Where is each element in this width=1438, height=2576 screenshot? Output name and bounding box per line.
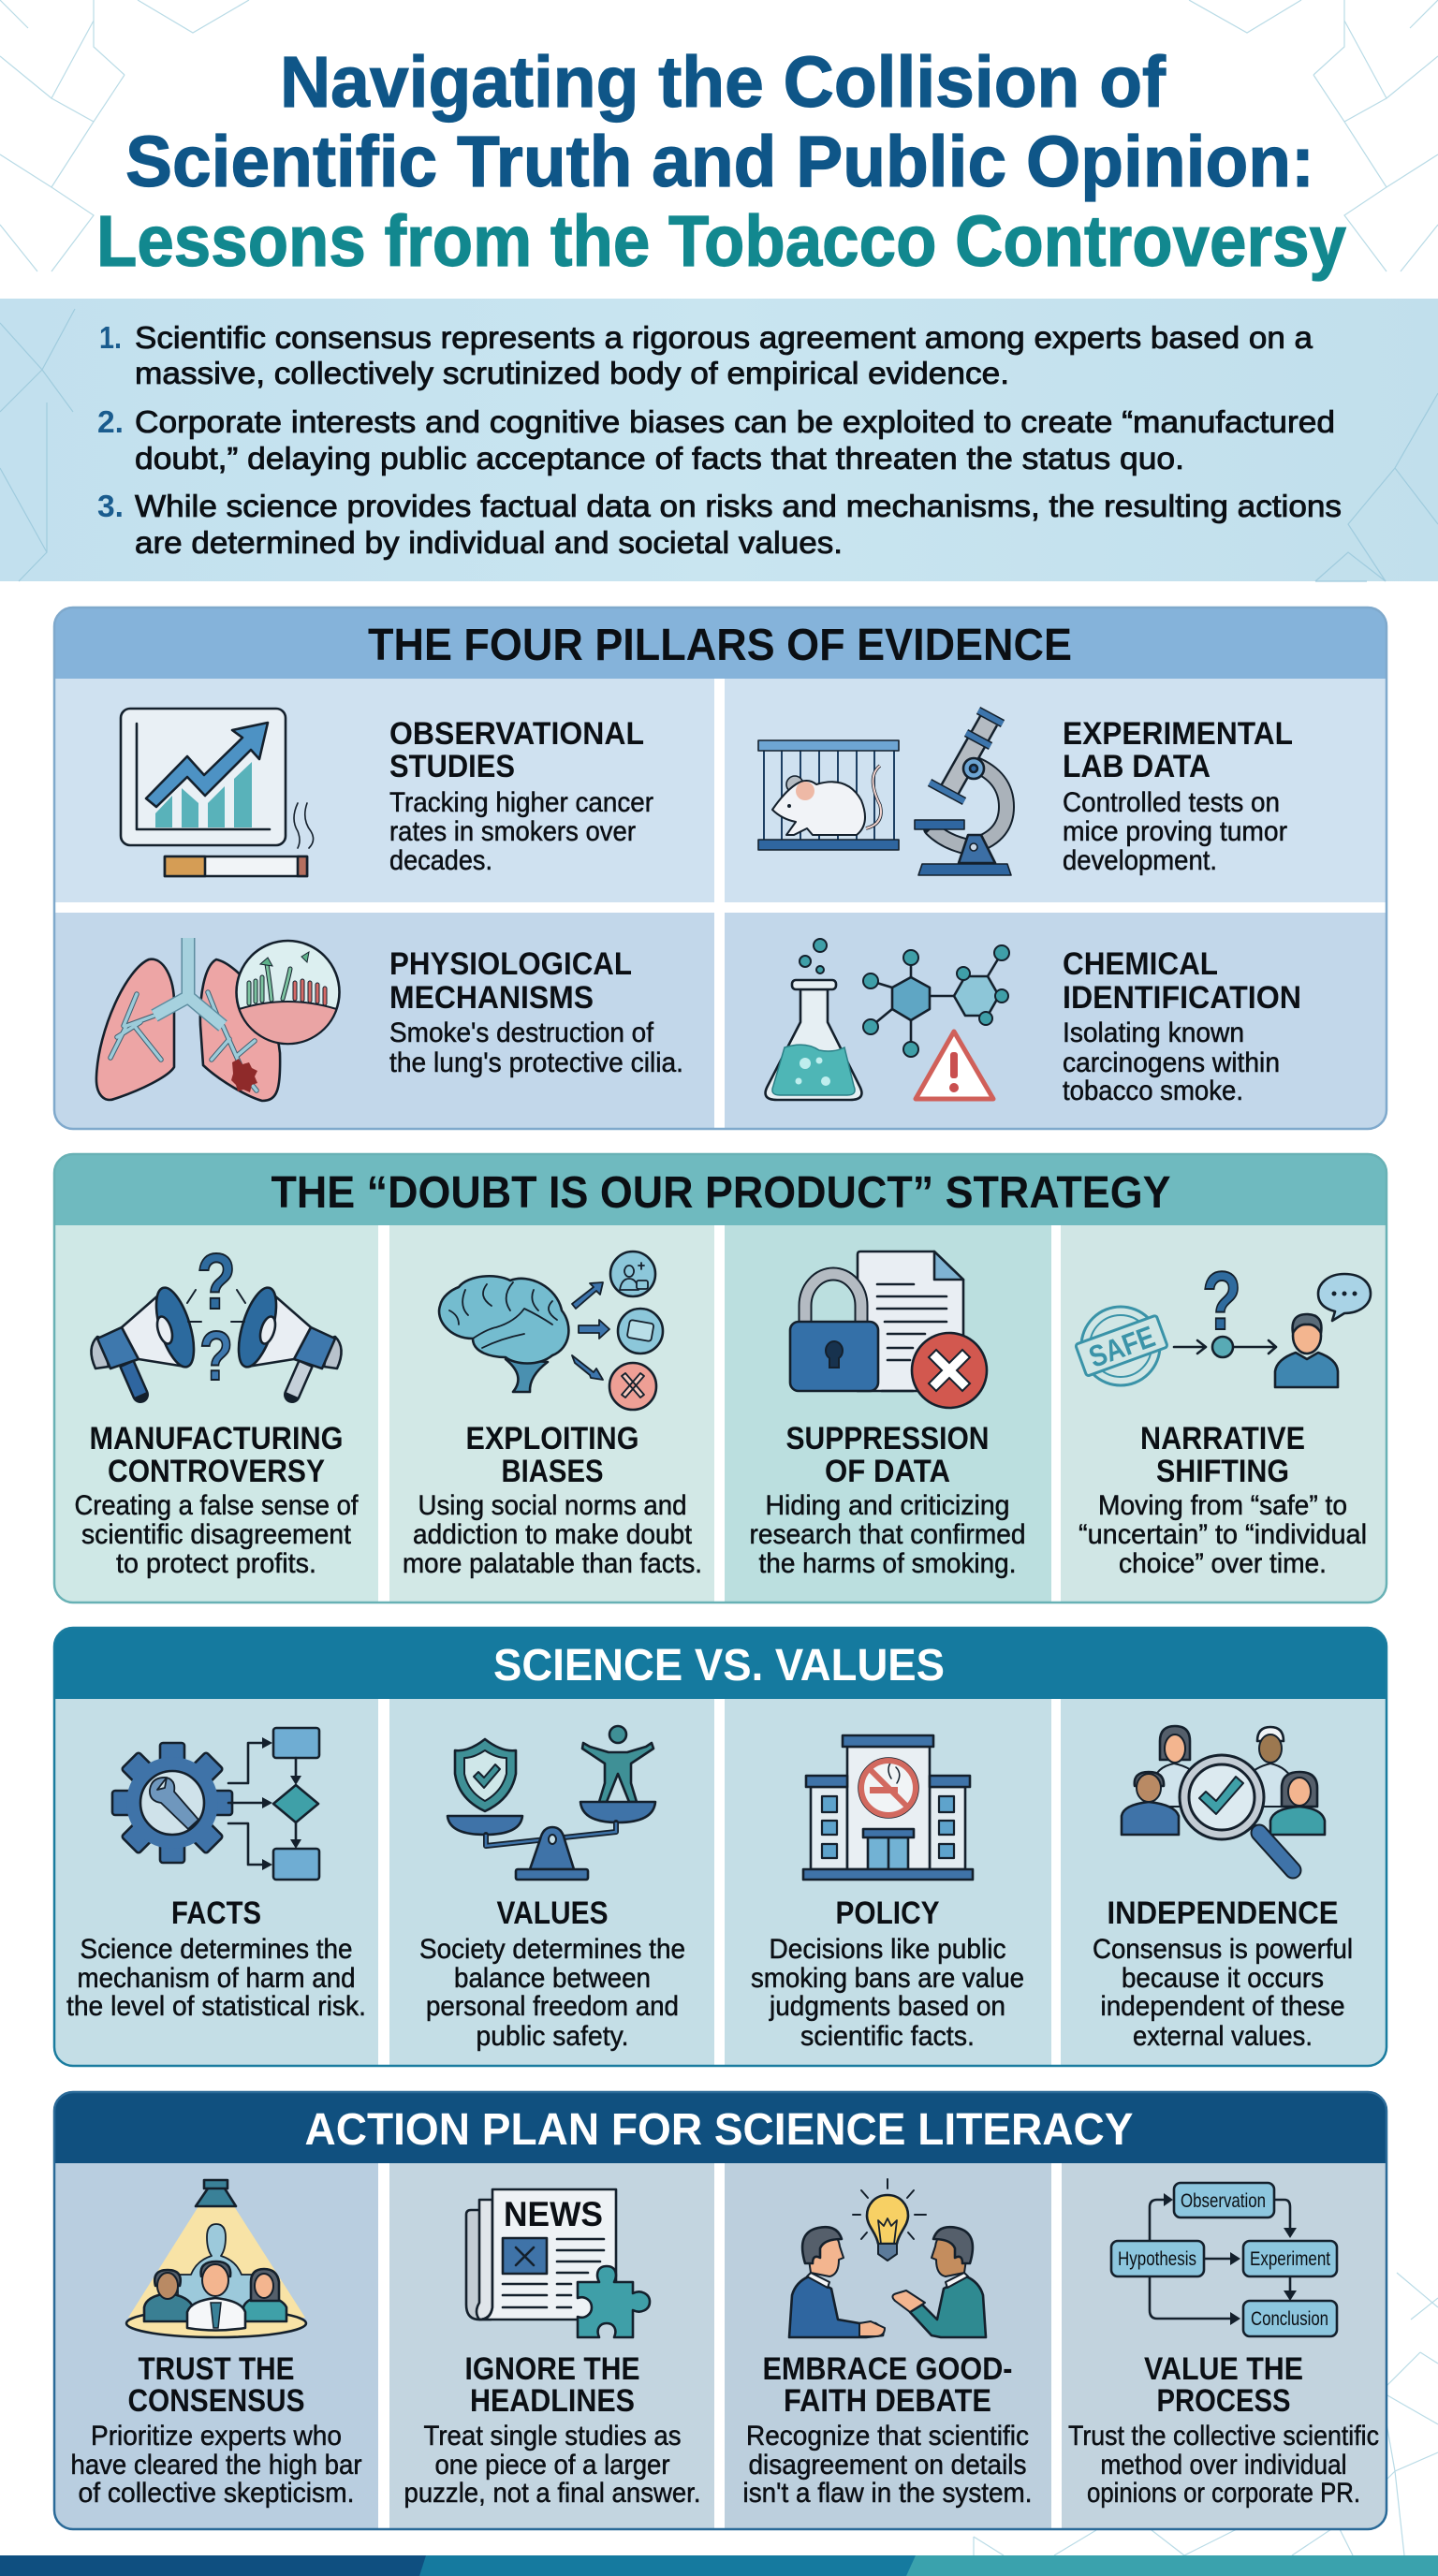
item: physiological mechanisms	[96, 938, 683, 1101]
item: ignore the headlines: Treat single studies as	[423, 2421, 682, 2452]
heading: doubt strategy: THE “DOUBT IS OUR PRODUCT” STRATEGY	[271, 1168, 1170, 1218]
item: observational studies: rates in smokers over	[389, 816, 636, 847]
item: physiological mechanisms: the lung's protective cilia.	[389, 1047, 683, 1078]
item: suppression of data: the harms of smoking.	[758, 1548, 1017, 1579]
item: narrative shifting: NARRATIVE	[1140, 1421, 1305, 1456]
takeaway 2: doubt,” delaying public acceptance of facts that threaten the status quo.	[135, 441, 1184, 476]
item: chemical identification	[766, 939, 1301, 1106]
takeaway 1: massive, collectively scrutinized body of empirical evidence.	[135, 356, 1009, 390]
icon: scientific method flowchart: Experiment	[1250, 2248, 1330, 2270]
item: manufacturing controversy	[75, 1237, 359, 1579]
icon: newspaper and puzzle piece: NEWS	[504, 2195, 603, 2233]
item: narrative shifting: Moving from “safe” to	[1098, 1490, 1347, 1521]
item: trust the consensus: TRUST THE	[139, 2351, 294, 2387]
title: Lessons from the Tobacco Controversy	[96, 201, 1346, 282]
item: value the process: VALUE THE	[1144, 2351, 1303, 2387]
item: policy: judgments based on	[769, 1991, 1005, 2022]
icon: newspaper and puzzle piece	[466, 2189, 650, 2337]
item: suppression of data: SUPPRESSION	[786, 1421, 989, 1456]
item: manufacturing controversy: CONTROVERSY	[108, 1454, 325, 1489]
item: exploiting biases: Using social norms and	[418, 1490, 687, 1521]
item: observational studies: Tracking higher cancer	[389, 787, 653, 818]
icon: lungs with cilia magnifier	[96, 938, 339, 1101]
icon: two people sharing an idea	[789, 2179, 986, 2337]
item: embrace good-faith debate: Recognize that scientific	[746, 2421, 1029, 2452]
item: ignore the headlines	[404, 2189, 700, 2509]
item: facts: Science determines the	[81, 1934, 352, 1965]
item: values	[419, 1726, 685, 2052]
icon: experts behind magnifying glass	[1122, 1726, 1325, 1870]
icon: scientific method flowchart	[1111, 2183, 1337, 2336]
item: suppression of data: OF DATA	[825, 1454, 950, 1489]
icon: safe stamp to question to person	[1076, 1254, 1371, 1387]
item: value the process	[1068, 2183, 1379, 2509]
item: policy: scientific facts.	[800, 2021, 975, 2052]
item: values: Society determines the	[419, 1934, 685, 1965]
item: facts: FACTS	[171, 1895, 261, 1931]
icon: flask, molecule and warning sign	[766, 939, 1009, 1100]
item: manufacturing controversy: Creating a false sense of	[75, 1490, 359, 1521]
item: policy	[751, 1735, 1024, 2052]
icon: padlock, document and red cross	[790, 1251, 987, 1408]
takeaway 3	[97, 489, 1342, 560]
heading: science vs values: SCIENCE VS. VALUES	[493, 1641, 945, 1690]
icon: scale with shield and person	[448, 1726, 655, 1880]
item: observational studies: OBSERVATIONAL	[389, 716, 644, 752]
takeaway 2: 2.	[97, 404, 124, 439]
title: Scientific Truth and Public Opinion:	[125, 122, 1314, 202]
footer band	[0, 2555, 1438, 2576]
item: value the process: Trust the collective scientific	[1068, 2421, 1379, 2452]
item: policy: Decisions like public	[770, 1934, 1005, 1965]
item: experimental lab data	[758, 710, 1293, 876]
item: value the process: opinions or corporate PR.	[1087, 2478, 1360, 2509]
item: suppression of data	[749, 1251, 1026, 1579]
takeaway 2: Corporate interests and cognitive biases can be exploited to create “manufactured	[135, 404, 1335, 439]
title: Navigating the Collision of	[280, 42, 1166, 123]
panel: science vs. values	[54, 1628, 1387, 2066]
item: experimental lab data: Controlled tests on	[1063, 787, 1280, 818]
item: embrace good-faith debate: FAITH DEBATE	[784, 2383, 991, 2419]
item: independence: external values.	[1133, 2021, 1313, 2052]
item: chemical identification: CHEMICAL	[1063, 946, 1218, 982]
icon: opposing megaphones with question marks: ?	[199, 1317, 233, 1395]
takeaway 1	[99, 320, 1313, 390]
item: policy: smoking bans are value	[751, 1963, 1024, 1994]
heading: the four pillars: THE FOUR PILLARS OF EVIDENCE	[368, 621, 1072, 670]
item: ignore the headlines: HEADLINES	[470, 2383, 635, 2419]
item: values: personal freedom and	[426, 1991, 679, 2022]
item: exploiting biases: EXPLOITING	[466, 1421, 638, 1456]
item: embrace good-faith debate: disagreement on details	[749, 2450, 1026, 2481]
item: observational studies: STUDIES	[389, 749, 515, 784]
item: embrace good-faith debate: EMBRACE GOOD-	[762, 2351, 1013, 2387]
item: values: balance between	[454, 1963, 651, 1994]
item: trust the consensus: Prioritize experts who	[91, 2421, 342, 2452]
item: facts: mechanism of harm and	[77, 1963, 356, 1994]
takeaway 3: While science provides factual data on risks and mechanisms, the resulting actions	[135, 489, 1342, 523]
takeaway 2	[97, 404, 1335, 476]
takeaway 1: Scientific consensus represents a rigorous agreement among experts based on a	[135, 320, 1313, 355]
item: narrative shifting: choice” over time.	[1119, 1548, 1327, 1579]
item: chemical identification: carcinogens within	[1063, 1047, 1280, 1078]
icon: opposing megaphones with question marks: ?	[197, 1237, 236, 1325]
item: independence: Consensus is powerful	[1093, 1934, 1353, 1965]
takeaway 1: 1.	[99, 320, 122, 355]
item: narrative shifting	[1076, 1254, 1371, 1579]
item: experimental lab data: mice proving tumor	[1063, 816, 1287, 847]
icon: rising chart and cigarette	[121, 709, 314, 876]
item: trust the consensus: of collective skepticism.	[79, 2478, 354, 2509]
icon: gear and flowchart	[112, 1728, 319, 1880]
item: manufacturing controversy: scientific disagreement	[81, 1519, 352, 1550]
item: trust the consensus	[71, 2180, 362, 2509]
item: physiological mechanisms: PHYSIOLOGICAL	[389, 946, 632, 982]
item: independence: INDEPENDENCE	[1107, 1895, 1339, 1931]
item: suppression of data: Hiding and criticizing	[766, 1490, 1009, 1521]
takeaway 3: are determined by individual and societal values.	[135, 525, 843, 560]
item: independence	[1093, 1726, 1353, 2052]
item: chemical identification: Isolating known	[1063, 1017, 1244, 1048]
item: suppression of data: research that confirmed	[749, 1519, 1026, 1550]
item: exploiting biases: BIASES	[502, 1454, 603, 1489]
item: manufacturing controversy: to protect profits.	[116, 1548, 316, 1579]
heading: action plan: ACTION PLAN FOR SCIENCE LITERACY	[305, 2105, 1133, 2155]
item: values: VALUES	[496, 1895, 609, 1931]
item: facts: the level of statistical risk.	[66, 1991, 366, 2022]
item: narrative shifting: “uncertain” to “individual	[1078, 1519, 1367, 1550]
item: embrace good-faith debate	[743, 2179, 1032, 2509]
panel: key takeaways	[0, 299, 1438, 581]
item: exploiting biases	[403, 1251, 702, 1579]
item: experimental lab data: EXPERIMENTAL	[1063, 716, 1293, 752]
item: facts	[66, 1728, 366, 2022]
icon: safe stamp to question to person: SAFE	[1084, 1319, 1159, 1374]
icon: caged mouse and microscope	[758, 710, 1011, 875]
icon: brain with arrows to bias symbols	[439, 1251, 663, 1410]
item: physiological mechanisms: Smoke's destruction of	[389, 1017, 654, 1048]
item: trust the consensus: have cleared the high bar	[71, 2450, 362, 2481]
item: experimental lab data: LAB DATA	[1063, 749, 1211, 784]
item: chemical identification: IDENTIFICATION	[1063, 980, 1301, 1016]
icon: experts under spotlight	[126, 2180, 306, 2337]
item: embrace good-faith debate: isn't a flaw in the system.	[743, 2478, 1032, 2509]
icon: scientific method flowchart: Observation	[1181, 2190, 1266, 2212]
item: value the process: method over individual	[1101, 2450, 1346, 2481]
item: trust the consensus: CONSENSUS	[127, 2383, 305, 2419]
item: independence: independent of these	[1101, 1991, 1344, 2022]
item: independence: because it occurs	[1122, 1963, 1324, 1994]
item: narrative shifting: SHIFTING	[1156, 1454, 1289, 1489]
item: exploiting biases: addiction to make doubt	[413, 1519, 693, 1550]
item: ignore the headlines: puzzle, not a final answer.	[404, 2478, 700, 2509]
icon: safe stamp to question to person: ?	[1202, 1254, 1241, 1347]
item: experimental lab data: development.	[1063, 845, 1217, 876]
panel: action plan for science literacy	[54, 2092, 1387, 2529]
icon: scientific method flowchart: Hypothesis	[1118, 2248, 1196, 2270]
item: physiological mechanisms: MECHANISMS	[389, 980, 594, 1016]
item: observational studies	[121, 709, 653, 876]
item: values: public safety.	[476, 2021, 629, 2052]
icon: opposing megaphones with question marks	[91, 1237, 342, 1395]
item: manufacturing controversy: MANUFACTURING	[90, 1421, 343, 1456]
item: exploiting biases: more palatable than facts.	[403, 1548, 702, 1579]
item: chemical identification: tobacco smoke.	[1063, 1076, 1243, 1106]
item: observational studies: decades.	[389, 845, 492, 876]
item: policy: POLICY	[835, 1895, 940, 1931]
item: ignore the headlines: IGNORE THE	[464, 2351, 640, 2387]
item: value the process: PROCESS	[1157, 2383, 1290, 2419]
title	[96, 42, 1346, 282]
icon: building with no smoking sign	[803, 1735, 973, 1880]
panel: the four pillars of evidence	[54, 607, 1387, 1129]
panel: the doubt is our product strategy	[54, 1154, 1387, 1603]
item: ignore the headlines: one piece of a larger	[434, 2450, 670, 2481]
takeaway 3: 3.	[97, 489, 124, 523]
icon: scientific method flowchart: Conclusion	[1251, 2308, 1328, 2330]
